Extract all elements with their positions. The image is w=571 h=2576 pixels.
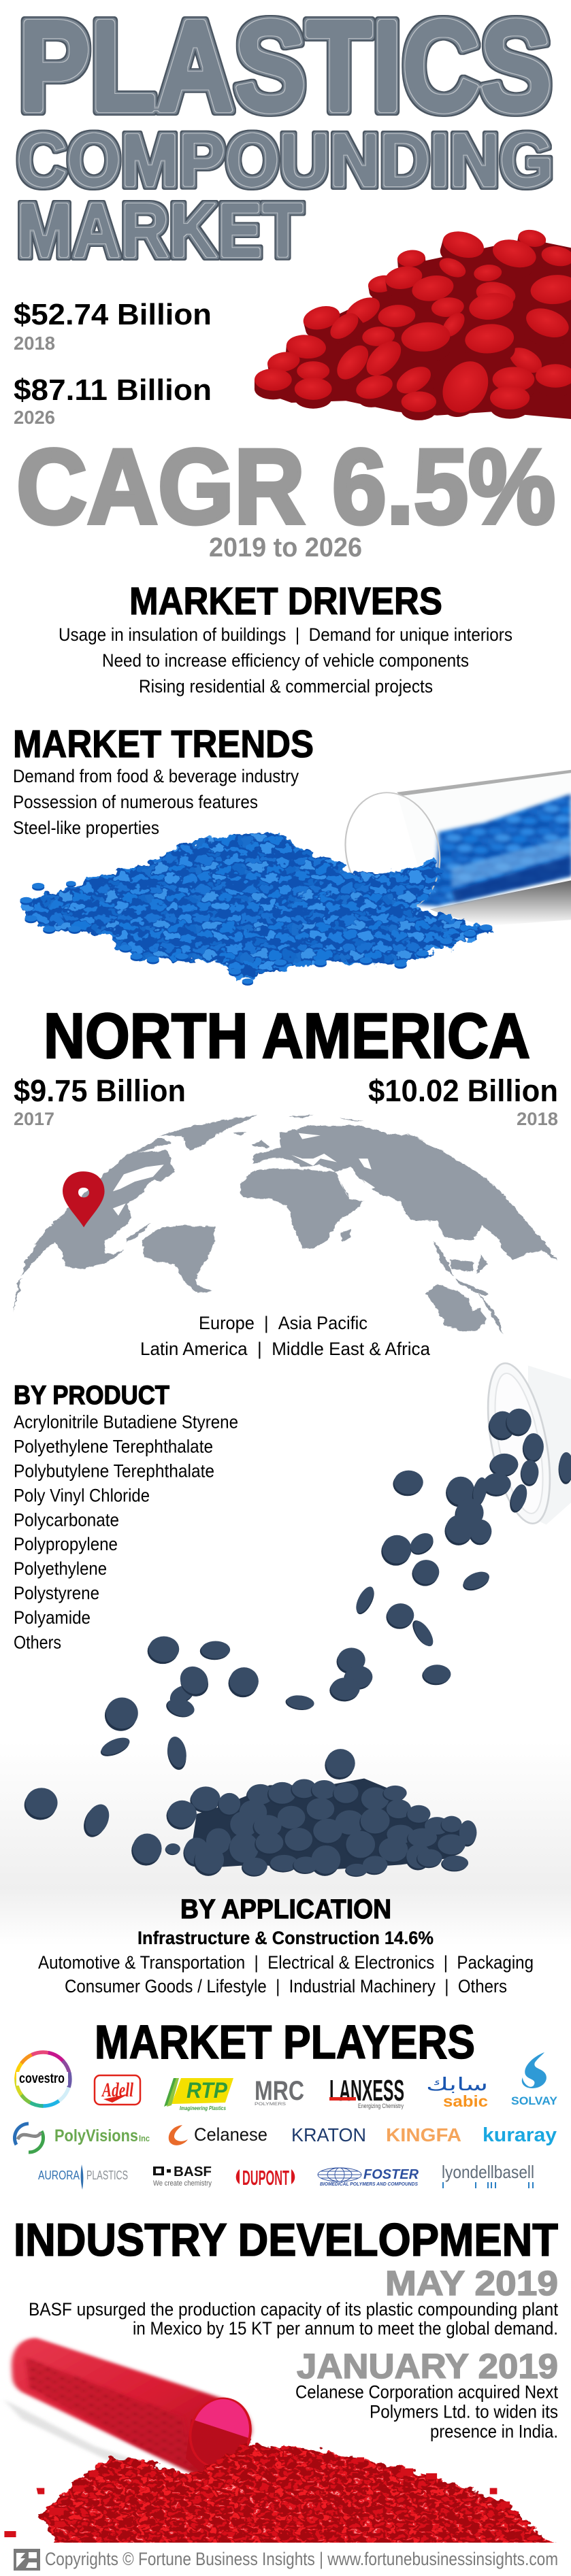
other regions: Europe | Asia Pacific: [199, 1313, 368, 1333]
by product: Polyethylene Terephthalate: [14, 1437, 213, 1457]
market trends: Steel-like properties: [13, 818, 159, 838]
logo: SABIC: sabic: [443, 2092, 488, 2110]
logo: PolyVisions: PolyVisions: [54, 2126, 138, 2145]
north america 2018: [368, 1073, 558, 1129]
logo: Celanese: [169, 2124, 267, 2145]
logo: PolyVisions: Inc: [139, 2133, 150, 2143]
north america 2018: $10.02 Billion: [368, 1073, 558, 1108]
development: January 2019: JANUARY 2019: [297, 2347, 558, 2386]
development: January 2019: [295, 2347, 558, 2442]
logo: Aurora Plastics: AURORA: [38, 2169, 80, 2182]
development: January 2019: presence in India.: [430, 2422, 558, 2442]
logo: Foster: [318, 2167, 419, 2187]
image: red plastic tablets pile: [255, 227, 571, 426]
logo: Kuraray: kuraray: [483, 2124, 557, 2146]
icon: Fortune Business Insights logo: [14, 2549, 40, 2571]
logo: RTP: RTP: [186, 2078, 228, 2103]
logo: Adell: Adell: [101, 2079, 133, 2101]
by application: Consumer Goods / Lifestyle | Industrial Machinery | Others: [65, 1976, 507, 1996]
logo: Foster: BIOMEDICAL POLYMERS AND COMPOUNDS: [320, 2182, 418, 2187]
logo: Lanxess: Energizing Chemistry: [358, 2103, 404, 2109]
market size 2026: $87.11 Billion: [14, 373, 212, 407]
other regions: [140, 1313, 431, 1359]
development: May 2019: [29, 2264, 558, 2339]
market drivers: [59, 580, 512, 697]
north america 2017: $9.75 Billion: [14, 1073, 186, 1108]
market drivers: Rising residential & commercial projects: [139, 676, 433, 697]
by product: BY PRODUCT: [14, 1381, 169, 1410]
floor shading: [0, 1741, 571, 1945]
CAGR figure: 2019 to 2026: [209, 533, 362, 563]
logo: LyondellBasell: lyondellbasell: [442, 2162, 534, 2182]
north america heading: NORTH AMERICA: [44, 1000, 530, 1071]
title: [16, 0, 554, 273]
image: dark tablets falling from glass jar: [25, 1359, 571, 1877]
market size 2026: 2026: [14, 407, 55, 428]
by product: Polycarbonate: [14, 1510, 119, 1530]
logo: BASF: BASF: [174, 2164, 212, 2179]
logo: Kraton: KRATON: [291, 2124, 366, 2145]
development: May 2019: MAY 2019: [385, 2264, 558, 2303]
by application: BY APPLICATION: [180, 1894, 391, 1924]
logo: BASF: We create chemistry: [153, 2179, 212, 2188]
logo: Solvay: SOLVAY: [511, 2094, 558, 2107]
north america 2017: 2017: [14, 1109, 54, 1129]
logo: covestro: covestro: [19, 2071, 65, 2086]
market trends: Possession of numerous features: [13, 792, 258, 812]
north america 2018: 2018: [517, 1109, 558, 1129]
by product: Polystyrene: [14, 1583, 99, 1603]
market size 2018: 2018: [14, 333, 55, 354]
logo: RTP: Imagineering Plastics: [180, 2105, 226, 2111]
logo: PolyVisions: [14, 2124, 150, 2152]
icon: location pin: [63, 1171, 105, 1227]
other regions: Latin America | Middle East & Africa: [140, 1339, 431, 1359]
logo: Adell: [95, 2075, 140, 2105]
logo: Lanxess: [329, 2074, 404, 2109]
by application: [38, 1894, 534, 1996]
logo: DuPont: DUPONT: [242, 2166, 289, 2190]
market trends: MARKET TRENDS: [13, 722, 314, 766]
by product: Poly Vinyl Chloride: [14, 1486, 150, 1506]
by product: Polybutylene Terephthalate: [14, 1461, 214, 1482]
logo: LyondellBasell: [442, 2162, 534, 2188]
market size 2026: [14, 373, 212, 428]
market trends: Demand from food & beverage industry: [13, 766, 299, 786]
by product: Others: [14, 1633, 61, 1653]
logo: Aurora Plastics: PLASTICS: [86, 2169, 128, 2182]
logo: MRC Polymers: MRC: [255, 2076, 304, 2106]
logo: SABIC: [426, 2075, 488, 2110]
market drivers: Usage in insulation of buildings | Demand for unique interiors: [59, 624, 512, 645]
market players heading: MARKET PLAYERS: [95, 2015, 475, 2069]
market size 2018: $52.74 Billion: [14, 298, 212, 331]
logo: RTP: [164, 2078, 233, 2111]
market drivers: MARKET DRIVERS: [129, 580, 442, 623]
north america 2017: [14, 1073, 186, 1129]
market drivers: Need to increase efficiency of vehicle components: [102, 650, 469, 671]
logo: DuPont: [236, 2166, 295, 2190]
by product: Polyethylene: [14, 1558, 107, 1579]
by product: Polypropylene: [14, 1534, 118, 1554]
by application: Infrastructure & Construction 14.6%: [137, 1928, 434, 1948]
logo: Aurora Plastics: [38, 2164, 128, 2190]
logo: Celanese: Celanese: [194, 2124, 267, 2145]
image: red pellets and test tube: [0, 2338, 571, 2567]
logo: MRC Polymers: POLYMERS: [255, 2103, 286, 2107]
logo: Kingfa: KINGFA: [386, 2124, 461, 2145]
market size 2018: [14, 298, 212, 354]
by product: Polyamide: [14, 1607, 91, 1628]
logo: Lanxess: LANXESS: [329, 2074, 404, 2107]
logo: Foster: FOSTER: [363, 2167, 419, 2182]
market trends: [13, 722, 314, 838]
logo: BASF: [153, 2164, 212, 2188]
by product: [14, 1381, 238, 1653]
logo: covestro: [16, 2052, 70, 2106]
logo: Solvay: [511, 2052, 558, 2107]
by product: Acrylonitrile Butadiene Styrene: [14, 1412, 238, 1433]
title: MARKET: [16, 188, 304, 273]
world map: [13, 1115, 557, 1335]
logo: SABIC: سابك: [426, 2075, 488, 2095]
image: blue granules and test tube: [20, 770, 571, 986]
